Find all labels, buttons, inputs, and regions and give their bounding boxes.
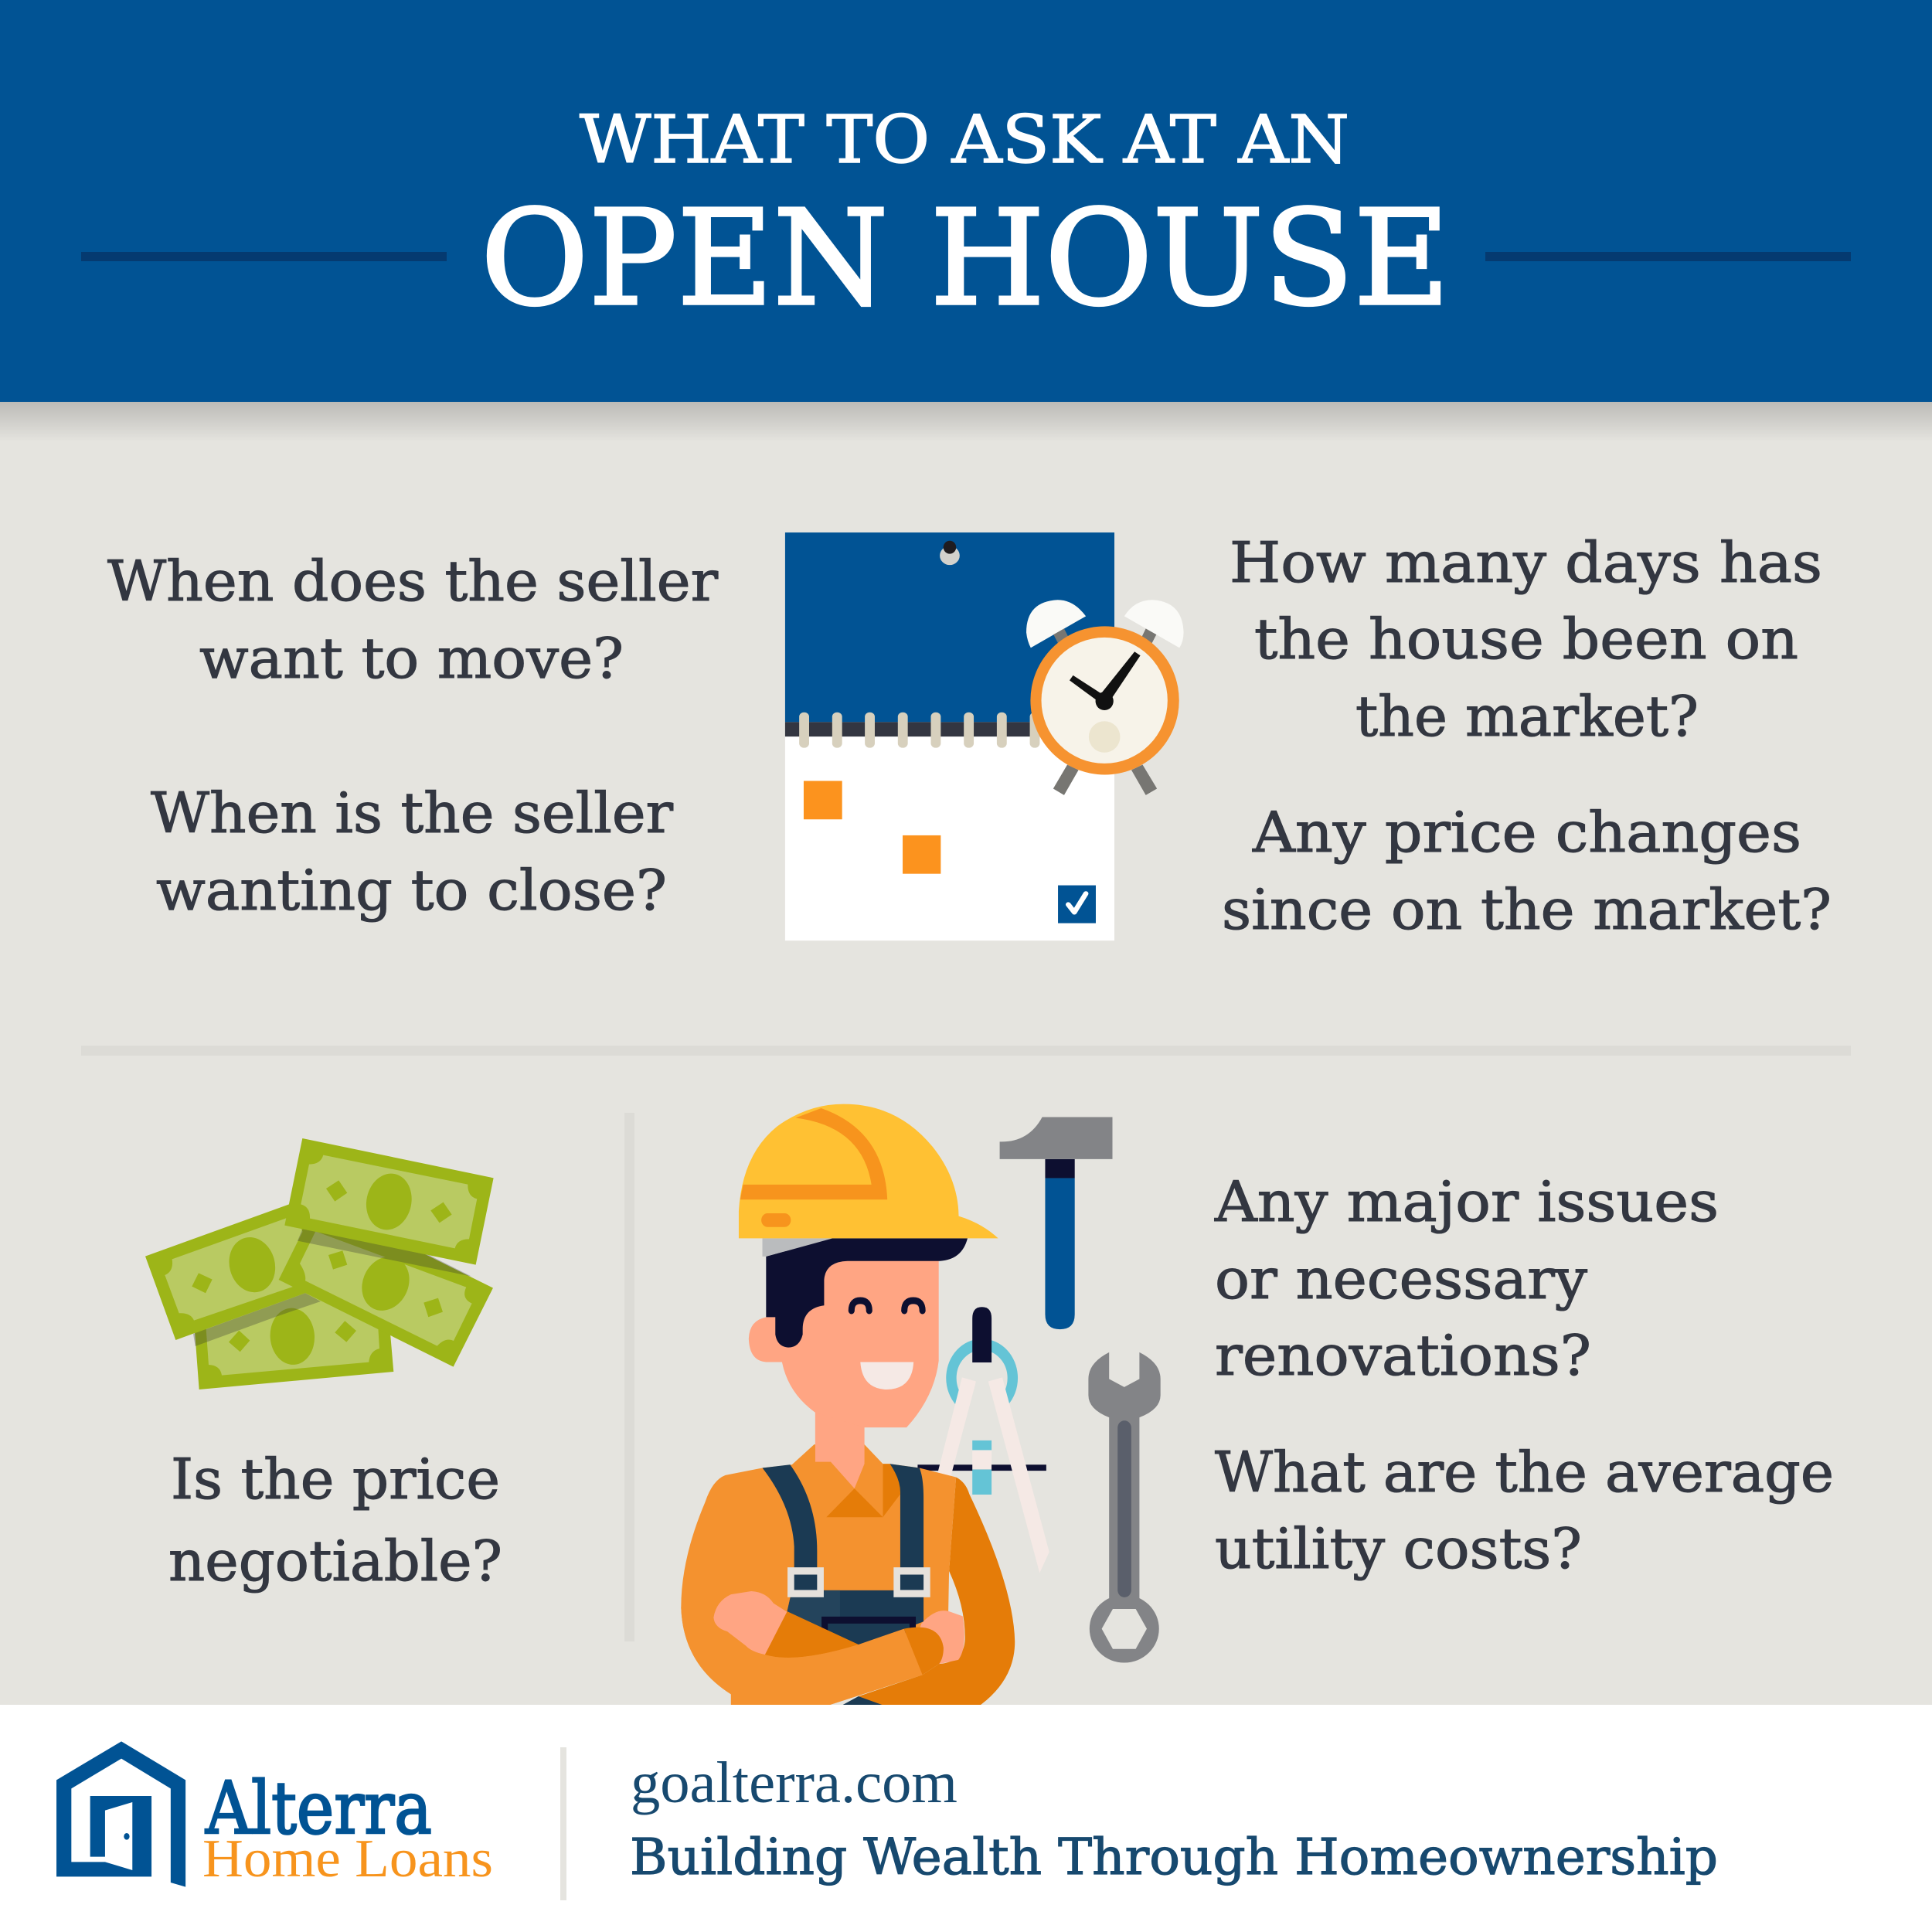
- questions: seller timing: When is the seller: [151, 781, 674, 845]
- questions: days on market: How many days has: [1230, 530, 1822, 595]
- logo: wordmark: Home Loans: [202, 1829, 493, 1889]
- worker: [681, 1104, 1015, 1706]
- hard hat: [739, 1104, 998, 1238]
- overalls: [763, 1464, 930, 1645]
- questions: issues and utilities: or necessary: [1215, 1247, 1587, 1311]
- icon: hammer: [1000, 1117, 1112, 1329]
- title: WHAT TO ASK AT AN: [580, 102, 1349, 179]
- icon: alarm clock: [1026, 600, 1184, 795]
- question: price: Is the price: [171, 1447, 500, 1512]
- illustration: construction worker with tools: [681, 1104, 1161, 1706]
- icon: wrench: [1088, 1352, 1161, 1663]
- icon: money bills: [145, 1138, 494, 1389]
- logo: wordmark: [202, 1767, 493, 1889]
- questions: issues and utilities: [1214, 1169, 1834, 1581]
- title: OPEN HOUSE: [481, 182, 1450, 335]
- shirt collar: [826, 1464, 900, 1517]
- logo: wordmark: Alterra: [205, 1767, 432, 1851]
- website and tagline: Building Wealth Through Homeownership: [630, 1828, 1718, 1886]
- questions: days on market: the house been on: [1254, 607, 1798, 672]
- title: [481, 102, 1450, 335]
- logo: house mark: [56, 1741, 185, 1887]
- question: price: negotiable?: [168, 1529, 502, 1594]
- icon: calendar with alarm clock: [785, 532, 1184, 940]
- questions: days on market: the market?: [1355, 684, 1699, 749]
- question: price: [168, 1447, 502, 1594]
- website and tagline: [630, 1750, 1718, 1886]
- questions: seller timing: [107, 549, 719, 923]
- header banner: [0, 0, 1932, 402]
- website and tagline: goalterra.com: [631, 1750, 957, 1815]
- questions: issues and utilities: Any major issues: [1214, 1169, 1719, 1234]
- questions: issues and utilities: renovations?: [1215, 1323, 1591, 1388]
- neck and head: [749, 1238, 968, 1488]
- right bill: [279, 1201, 493, 1367]
- left bill: [145, 1200, 330, 1340]
- questions: seller timing: wanting to close?: [156, 858, 667, 923]
- questions: days on market: [1222, 530, 1832, 942]
- questions: issues and utilities: What are the average: [1215, 1440, 1834, 1505]
- questions: issues and utilities: utility costs?: [1215, 1516, 1582, 1581]
- icon: compass: [917, 1307, 1049, 1573]
- questions: seller timing: When does the seller: [107, 549, 719, 614]
- crossed arms: [681, 1591, 964, 1706]
- bottom bill: [192, 1285, 393, 1389]
- questions: seller timing: want to move?: [199, 626, 624, 691]
- top bill: [284, 1138, 494, 1265]
- questions: days on market: since on the market?: [1222, 877, 1832, 942]
- footer: [0, 1705, 1932, 1932]
- questions: days on market: Any price changes: [1252, 800, 1801, 865]
